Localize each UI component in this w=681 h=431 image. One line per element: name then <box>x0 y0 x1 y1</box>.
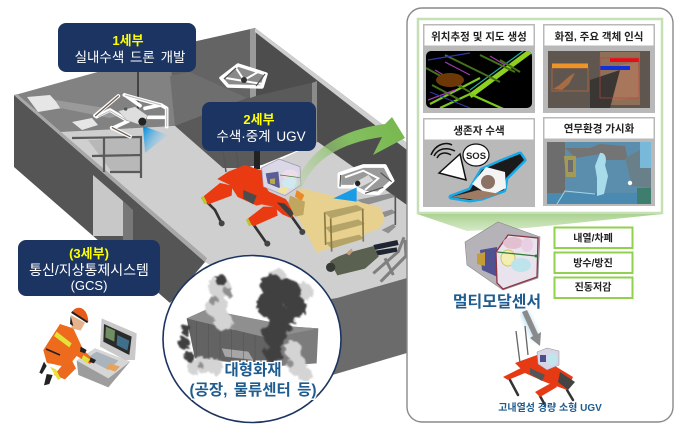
person <box>451 154 524 200</box>
callout wedge <box>417 214 663 231</box>
antennas <box>223 151 239 172</box>
panel: multimodal sensor <box>407 8 673 422</box>
label: heat resistance <box>554 228 632 248</box>
heading: multimodal sensor: 멀티모달센서 <box>453 293 541 311</box>
legs <box>208 203 302 243</box>
callout: 2세부: 수색·중계 UGV <box>216 129 306 144</box>
tile: fire object recognition <box>543 24 655 113</box>
building scene <box>14 28 407 378</box>
drone 2 <box>333 166 393 202</box>
tile: mapping: 위치추정 및 지도 생성 <box>431 30 527 43</box>
console lid <box>100 318 137 360</box>
icon: multimodal sensor <box>465 222 540 290</box>
tile: fire object recognition: 화점, 주요 객체 인식 <box>555 30 643 43</box>
inset circle: large fire: (공장, 물류센터 등) <box>189 381 317 399</box>
torso and arm <box>43 324 93 365</box>
callout: 1세부: 실내수색 드론 개발 <box>75 50 185 65</box>
arrow: sensor to UGV <box>522 310 541 346</box>
head and helmet <box>71 315 85 331</box>
tile: survivor search <box>423 118 535 207</box>
console base <box>77 348 130 387</box>
label: waterproof: 방수/방진 <box>573 256 613 270</box>
callout: 3세부: (GCS) <box>71 278 107 293</box>
megaphone <box>439 154 466 180</box>
scan beam <box>333 187 357 202</box>
icon: drone 1 <box>95 95 167 137</box>
back wall <box>15 28 255 135</box>
robot dog UGV with sensor <box>201 159 305 247</box>
legs and boots <box>43 343 76 379</box>
icon: back drone <box>221 65 266 87</box>
label: vibration damping <box>554 278 632 298</box>
label: vibration damping: 진동저감 <box>575 280 611 294</box>
callout: 1세부: 1세부 <box>112 33 144 48</box>
tile: survivor search: 생존자 수색 <box>453 125 505 137</box>
orange body <box>201 165 295 226</box>
lying person <box>326 240 399 275</box>
metal shelving <box>357 193 396 233</box>
floor <box>60 126 407 320</box>
scan beam: drone 1 <box>143 126 168 153</box>
callout: 2세부: 2세부 <box>243 112 275 127</box>
tile: smoke visualization <box>543 117 655 206</box>
wall shelf <box>27 95 142 178</box>
callout: 3세부 <box>18 240 160 296</box>
label: waterproof <box>554 252 632 273</box>
tile: survivor search: SOS <box>466 151 486 162</box>
yellow sensing cone <box>296 188 385 253</box>
label: heat resistance: 내열/차폐 <box>573 232 613 244</box>
icon: compact UGV <box>503 326 575 405</box>
chair frame <box>373 237 406 282</box>
left wall <box>14 95 205 303</box>
right lower wall <box>322 278 407 378</box>
sensor box <box>262 159 301 196</box>
scene right: shelf, person, drone <box>324 166 406 282</box>
callout: 1세부 <box>58 23 196 72</box>
burning warehouse <box>187 309 318 367</box>
callout: 2세부 <box>202 102 316 151</box>
caption: 대형화재 <box>224 361 282 379</box>
callout: 3세부: 통신/지상통제시스템 <box>29 262 149 278</box>
smoke plumes <box>178 268 313 382</box>
green frame <box>418 19 662 213</box>
inset circle: large fire <box>163 256 341 422</box>
curved green arrow <box>294 117 405 190</box>
callout: 3세부: (3세부) <box>69 246 109 261</box>
tile: mapping <box>423 24 535 113</box>
illustration: firefighter with control station <box>39 308 137 387</box>
caption: compact UGV: 고내열성 경량 소형 UGV <box>498 401 602 414</box>
tan shelf <box>324 205 365 252</box>
tile: smoke visualization: 연무환경 가시화 <box>564 122 635 135</box>
